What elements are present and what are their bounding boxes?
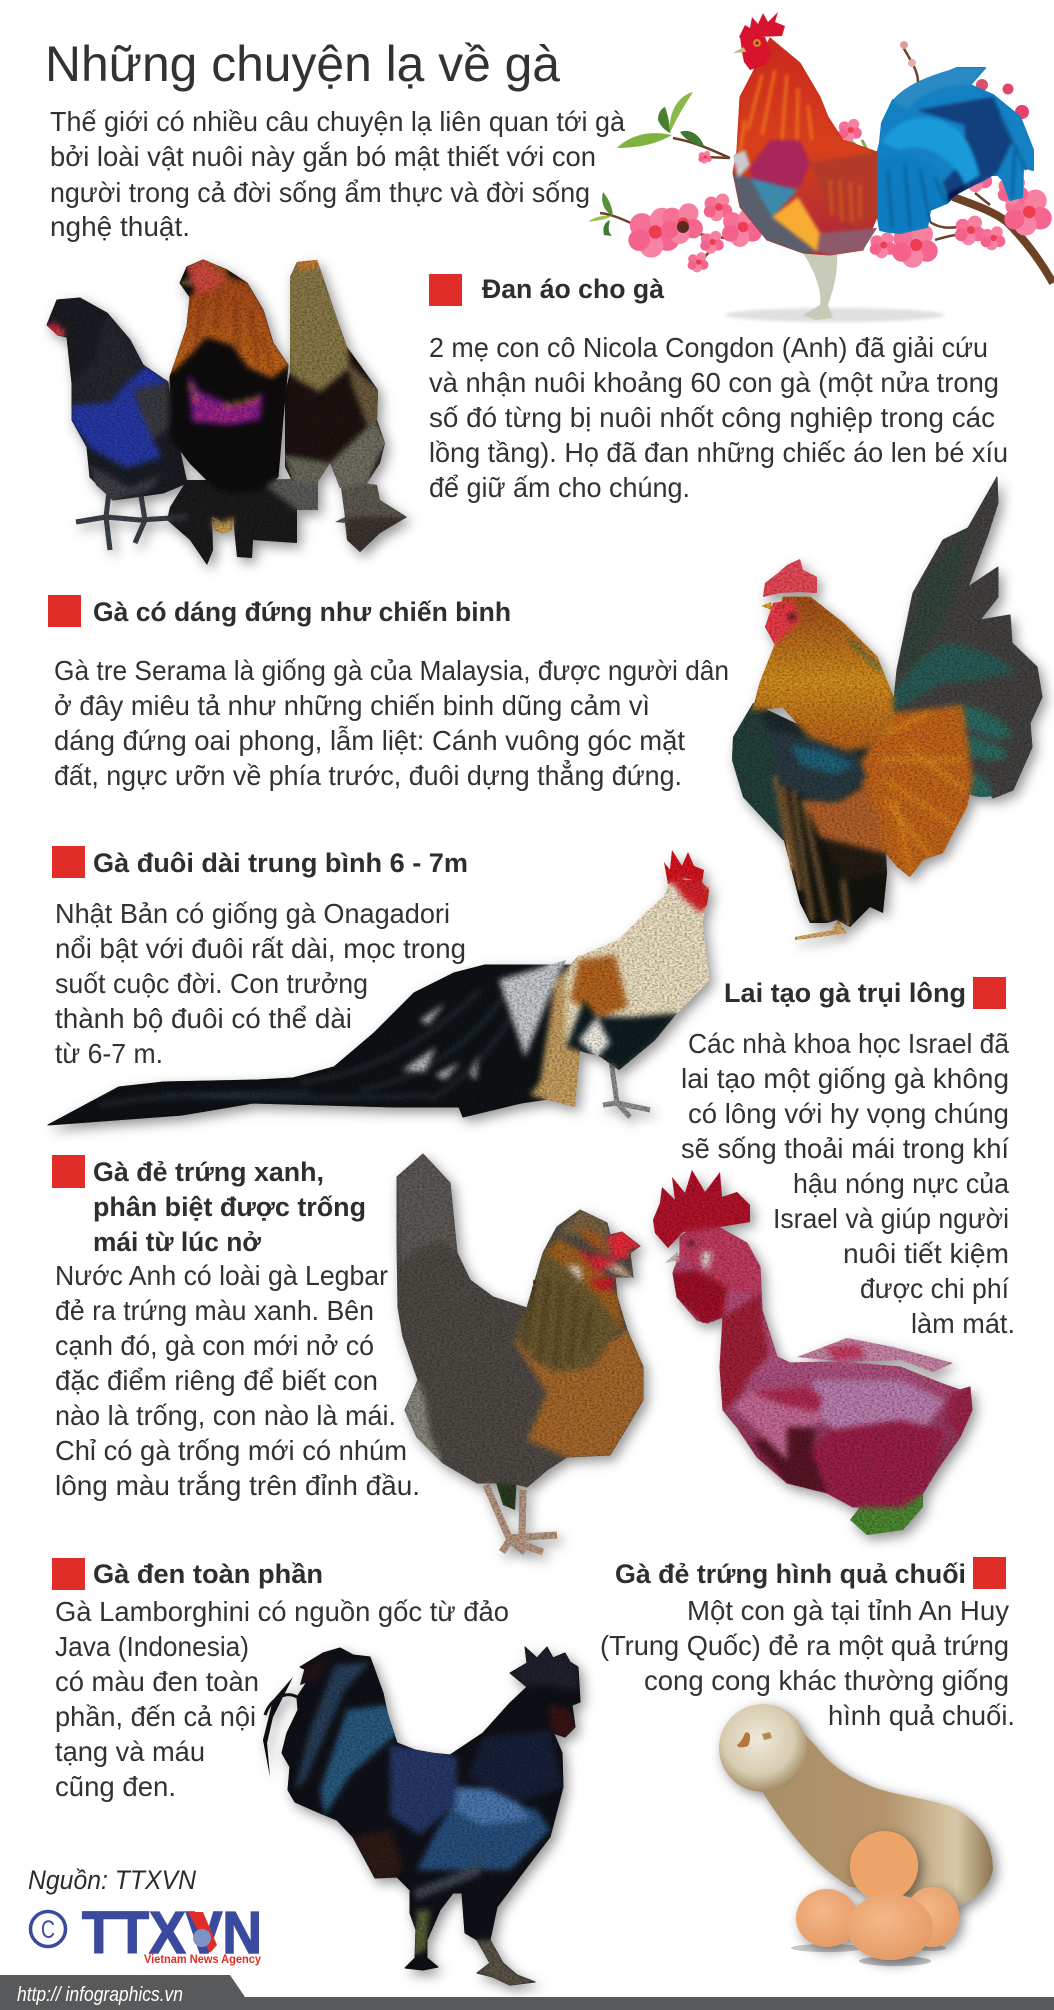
- text: Đan áo cho gà: số đó từng bị nuôi nhốt công nghiệp trong các: [429, 402, 995, 433]
- text: featherless chicken: lai tạo một giống gà không: [681, 1063, 1009, 1094]
- text: banana egg: Một con gà tại tỉnh An Huy: [687, 1595, 1009, 1626]
- dark wing: [732, 703, 783, 840]
- body and neck: [673, 1228, 972, 1507]
- blue body: [770, 730, 867, 803]
- tail: [320, 1705, 395, 1815]
- heading: Gà đẻ trứng xanh: [93, 1157, 366, 1257]
- illustration: colourful rooster with peach blossoms: [588, 12, 1053, 322]
- heading: Lai tạo gà trụi lông: Lai tạo gà trụi lông: [724, 978, 966, 1008]
- text: banana egg: (Trung Quốc) đẻ ra một quả trứng: [600, 1630, 1009, 1661]
- comb, head: [664, 850, 704, 884]
- text: Đan áo cho gà: để giữ ấm cho chúng.: [429, 472, 690, 503]
- photo: Legbar hen: [397, 1154, 643, 1552]
- text: Serama: [54, 655, 729, 791]
- body: [733, 38, 877, 255]
- intro text: bởi loài vật nuôi này gắn bó mật thiết với con: [50, 141, 596, 172]
- right hen feet: [335, 480, 407, 552]
- text: Legbar: cạnh đó, gà con mới nở có: [55, 1330, 374, 1361]
- text: Legbar: lông màu trắng trên đỉnh đầu.: [55, 1470, 420, 1501]
- text: Đan áo cho gà: 2 mẹ con cô Nicola Congdon (Anh) đã giải cứu: [429, 332, 988, 363]
- text: Đan áo cho gà: [429, 332, 1008, 503]
- legs: [486, 1485, 557, 1552]
- text: featherless chicken: sẽ sống thoải mái trong khí: [681, 1133, 1009, 1164]
- text: Onagadori: Nhật Bản có giống gà Onagadori: [55, 898, 450, 929]
- leg: [803, 253, 837, 320]
- text: Lamborghini: tạng và máu: [55, 1736, 205, 1767]
- icon: red square: [52, 1558, 85, 1590]
- text: Lamborghini: Java (Indonesia): [55, 1631, 249, 1662]
- hackle: [390, 1745, 457, 1835]
- long tail feather: [263, 1677, 293, 1777]
- text: Legbar: Nước Anh có loài gà Legbar: [55, 1260, 388, 1291]
- photo: Onagadori long-tailed rooster: [48, 850, 709, 1125]
- head and comb: [739, 12, 785, 42]
- text: Legbar: [55, 1260, 420, 1501]
- saddle: [499, 960, 566, 1057]
- text: Lamborghini: có màu đen toàn: [55, 1666, 259, 1697]
- head: [557, 1210, 610, 1257]
- heading: Gà đen toàn phần: Gà đen toàn phần: [93, 1559, 323, 1589]
- photo: black rooster: [263, 1647, 580, 1985]
- feet: [795, 920, 847, 940]
- text: Serama: đất, ngực ưỡn về phía trước, đuôi dựng thẳng đứng.: [54, 759, 682, 791]
- footer bar: http:// infographics.vn: [17, 1984, 183, 2006]
- text: Legbar: đẻ ra trứng màu xanh. Bên: [55, 1295, 374, 1326]
- icon: red square: [973, 1557, 1006, 1589]
- title: Những chuyện lạ về gà: [45, 36, 560, 92]
- footer bar: [0, 1975, 1054, 2010]
- text: banana egg: hình quả chuối.: [828, 1700, 1015, 1731]
- body underlay: [743, 703, 887, 877]
- wattle: [673, 1270, 727, 1323]
- text: Serama: ở đây miêu tả như những chiến binh dũng cảm vì: [54, 690, 650, 721]
- text: Legbar: nào là trống, con nào là mái.: [55, 1400, 396, 1431]
- patterned jumper: [188, 373, 263, 425]
- text: Onagadori: từ 6-7 m.: [55, 1038, 163, 1069]
- black hen: [47, 298, 187, 500]
- text: featherless chicken: Các nhà khoa học Israel đã: [688, 1028, 1010, 1059]
- heading: Đan áo cho gà: Đan áo cho gà: [482, 274, 665, 304]
- wattle: [548, 1705, 575, 1737]
- icon: red square: [52, 846, 85, 878]
- heading: Gà đẻ trứng xanh: Gà đẻ trứng xanh,: [93, 1157, 324, 1187]
- photo: three hens in jumpers: [47, 260, 407, 565]
- photo: banana-shaped egg with eggs: [719, 1704, 993, 1966]
- source: Nguồn: TTXVN: [28, 1865, 196, 1895]
- grey tail feathers: [893, 477, 1042, 798]
- blossoms: [628, 208, 680, 258]
- text: banana egg: cong cong khác thường giống: [644, 1665, 1009, 1696]
- logo: copyright mark: C: [41, 1916, 55, 1944]
- text: Legbar: đặc điểm riêng để biết con: [55, 1365, 378, 1396]
- text: Đan áo cho gà: lồng tầng). Họ đã đan những chiếc áo len bé xíu: [429, 437, 1008, 468]
- black tail strip: [773, 770, 887, 927]
- centre hen feet: [167, 480, 297, 565]
- text: featherless chicken: Israel và giúp người: [773, 1203, 1009, 1234]
- intro text: nghệ thuật.: [50, 211, 190, 242]
- black hen legs: [76, 483, 187, 550]
- icon: red square: [52, 1155, 85, 1188]
- leaves: [617, 133, 672, 148]
- photo: featherless rooster: [653, 1170, 972, 1535]
- intro text: [50, 106, 626, 242]
- icon: red square: [48, 595, 81, 627]
- text: featherless chicken: hậu nóng nực của: [793, 1168, 1010, 1199]
- body: [397, 1154, 643, 1487]
- logo: TTXVN: TTXVN: [82, 1900, 262, 1966]
- legs: [415, 1910, 430, 1955]
- text: featherless chicken: có lông với hy vọng chúng: [688, 1098, 1009, 1129]
- head: [680, 1228, 760, 1295]
- body silhouette: [282, 1647, 580, 1985]
- neck: [566, 877, 709, 1070]
- text: featherless chicken: [681, 1028, 1015, 1339]
- text: Serama: Gà tre Serama là giống gà của Malaysia, được người dân: [54, 655, 729, 686]
- text: featherless chicken: nuôi tiết kiệm: [843, 1238, 1009, 1269]
- comb, face: [763, 559, 817, 597]
- comb: [653, 1170, 750, 1248]
- text: featherless chicken: làm mát.: [911, 1308, 1015, 1339]
- orange saddle: [855, 705, 973, 877]
- gold hackle: [753, 597, 893, 750]
- text: Onagadori: nổi bật với đuôi rất dài, mọc trong: [55, 933, 466, 964]
- long tail: [48, 965, 575, 1125]
- right hen: [285, 260, 385, 488]
- text: banana egg: [600, 1595, 1015, 1731]
- text: Onagadori: [55, 898, 466, 1069]
- text: featherless chicken: được chi phí: [860, 1273, 1009, 1304]
- intro text: người trong cả đời sống ẩm thực và đời sống: [50, 177, 590, 208]
- text: Đan áo cho gà: và nhận nuôi khoảng 60 con gà (một nửa trong: [429, 367, 999, 398]
- blue tail: [875, 68, 1033, 233]
- heading: Gà đẻ trứng xanh: phân biệt được trống: [93, 1192, 366, 1222]
- logo: TTXVN: Vietnam News Agency: [144, 1952, 261, 1966]
- body feathers: [417, 1790, 550, 1870]
- text: Serama: dáng đứng oai phong, lẫm liệt: Cánh vuông góc mặt: [54, 725, 685, 756]
- intro text: Thế giới có nhiều câu chuyện lạ liên quan tới gà: [50, 106, 626, 137]
- text: Lamborghini: cũng đen.: [55, 1771, 176, 1802]
- branches: [953, 197, 1053, 283]
- heading: Gà đẻ trứng hình quả chuối: Gà đẻ trứng hình quả chuối: [615, 1559, 966, 1589]
- text: Onagadori: thành bộ đuôi có thể dài: [55, 1003, 352, 1034]
- heading: Gà đẻ trứng xanh: mái từ lúc nở: [93, 1227, 262, 1257]
- heading: Gà đuôi dài trung bình 6 - 7m: Gà đuôi dài trung bình 6 - 7m: [93, 848, 468, 878]
- text: Lamborghini: [55, 1596, 509, 1802]
- icon: red square: [429, 274, 462, 306]
- centre hen: [170, 260, 288, 493]
- comb: [510, 1647, 578, 1690]
- logo: copyright mark: [30, 1912, 66, 1946]
- text: Lamborghini: Gà Lamborghini có nguồn gốc từ đảo: [55, 1596, 509, 1627]
- heading: Gà có dáng đứng như chiến binh: Gà có dáng đứng như chiến binh: [93, 597, 511, 627]
- text: Lamborghini: phần, đến cả nội: [55, 1701, 256, 1732]
- text: Legbar: Chỉ có gà trống mới có nhúm: [55, 1435, 407, 1466]
- icon: red square: [973, 977, 1006, 1009]
- text: Onagadori: suốt cuộc đời. Con trưởng: [55, 968, 368, 999]
- grass: [850, 1493, 923, 1535]
- photo: Serama rooster: [732, 477, 1042, 940]
- leg: [603, 1060, 650, 1117]
- thigh: [803, 785, 883, 877]
